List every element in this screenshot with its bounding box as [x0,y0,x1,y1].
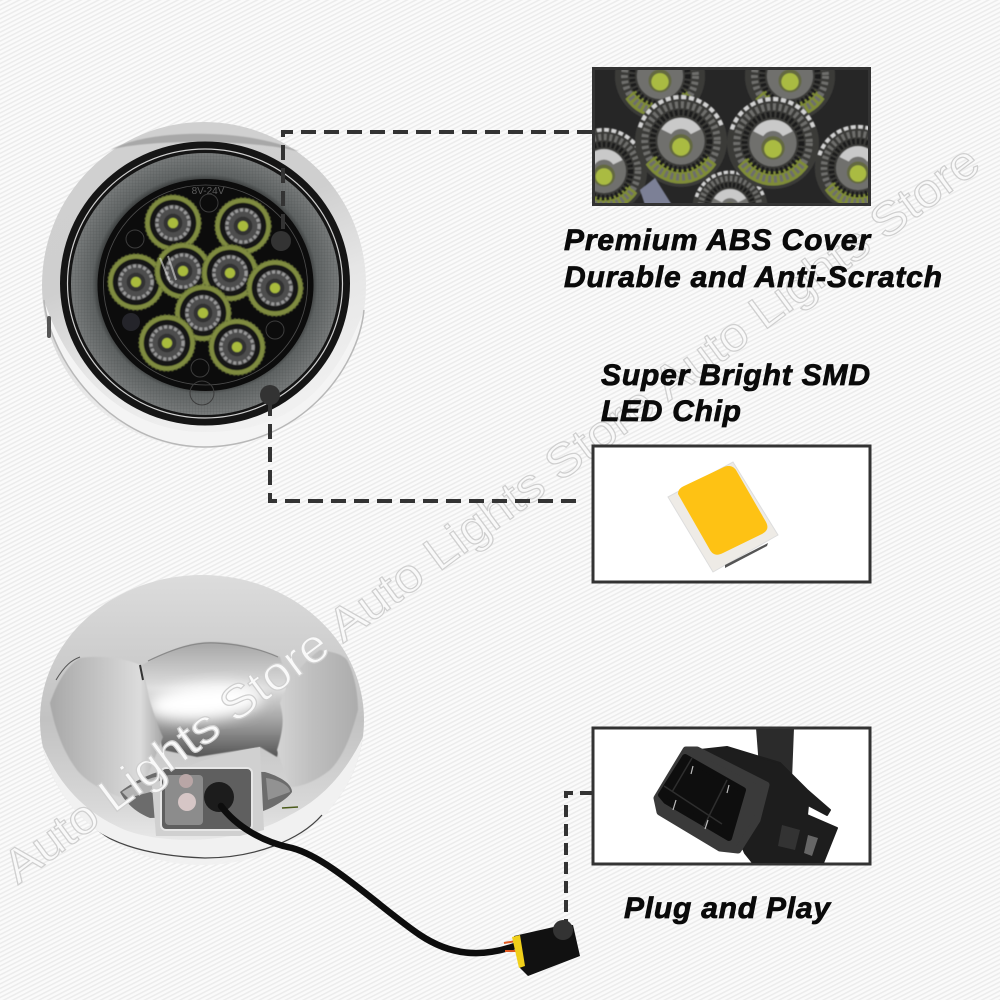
dark bezel ring [60,142,350,426]
LED lens cluster [108,195,303,375]
mounting plate [120,770,292,818]
panel: plug connector [593,728,870,864]
inner black reflector [98,179,314,391]
heading: cover feature: Premium ABS Cover [564,224,872,257]
connector rear body [700,747,837,863]
callout line: plug [553,793,592,940]
watermark: Auto Lights Store [643,134,989,410]
watermark: Auto Lights Store [0,617,339,893]
callout line: LED chip [260,385,576,501]
heading: LED chip feature: LED Chip [601,395,741,428]
heading: LED chip feature: Super Bright SMD [601,359,870,392]
cable [756,730,794,774]
heading: cover feature [564,224,942,294]
connector plug [514,925,580,976]
chrome dome [40,575,364,865]
watermark: Auto Lights Store [318,375,664,652]
heading: cover feature: Durable and Anti-Scratch [564,261,942,294]
wiring cable with connector [221,806,580,976]
connector face [657,750,766,850]
heading: plug feature: Plug and Play [624,892,831,925]
watermark [0,134,989,893]
panel: SMD LED chip [593,446,870,582]
panel: lens close-up [592,67,871,206]
grey diffuser ring [71,153,339,415]
chrome outer housing [42,122,366,448]
dome reflections [40,642,364,880]
callout line: cover [271,132,592,251]
voltage marking: 8V-24V [192,186,225,197]
product photo: back of headlight [40,575,364,880]
icon: SMD chip [668,462,778,572]
bracket [152,747,264,836]
product photo: front of headlight [42,122,366,448]
bottom white band [43,738,362,842]
connector pins [664,758,727,826]
heading: LED chip feature [601,359,870,428]
